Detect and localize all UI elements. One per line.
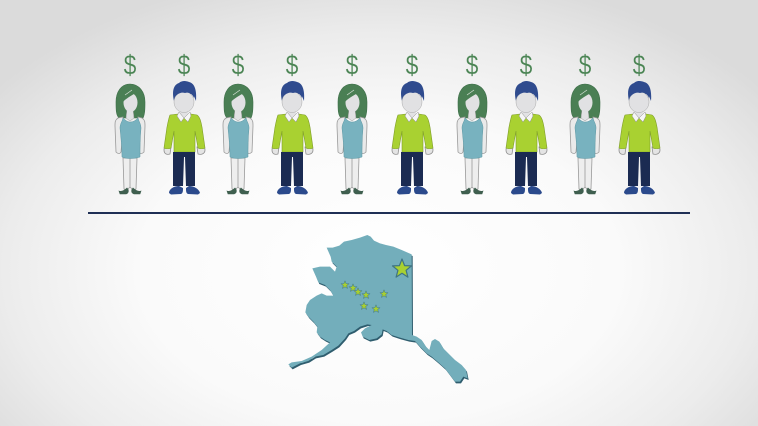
person 1: woman with dollar sign <box>115 50 145 194</box>
person 9: woman with dollar sign: $ <box>579 50 591 81</box>
person 4: man with dollar sign <box>272 50 313 194</box>
person 6: man with dollar sign: $ <box>406 50 418 81</box>
person 7: woman with dollar sign <box>457 50 487 194</box>
person 7: woman with dollar sign: $ <box>466 50 478 81</box>
person 1: woman with dollar sign: $ <box>124 50 136 81</box>
people row with dollar signs <box>115 50 660 194</box>
large star <box>392 259 412 277</box>
person 5: woman with dollar sign <box>337 50 367 194</box>
map of Alaska with flag stars <box>288 235 469 383</box>
person 6: man with dollar sign <box>392 50 433 194</box>
person 2: man with dollar sign <box>164 50 205 194</box>
person 10: man with dollar sign <box>619 50 660 194</box>
person 8: man with dollar sign: $ <box>520 50 532 81</box>
person 5: woman with dollar sign: $ <box>346 50 358 81</box>
person 4: man with dollar sign: $ <box>286 50 298 81</box>
person 3: woman with dollar sign <box>223 50 253 194</box>
person 8: man with dollar sign <box>506 50 547 194</box>
divider line <box>88 212 690 214</box>
small stars <box>341 281 388 312</box>
map shape <box>288 235 469 383</box>
person 2: man with dollar sign: $ <box>178 50 190 81</box>
person 3: woman with dollar sign: $ <box>232 50 244 81</box>
person 9: woman with dollar sign <box>570 50 600 194</box>
person 10: man with dollar sign: $ <box>633 50 645 81</box>
